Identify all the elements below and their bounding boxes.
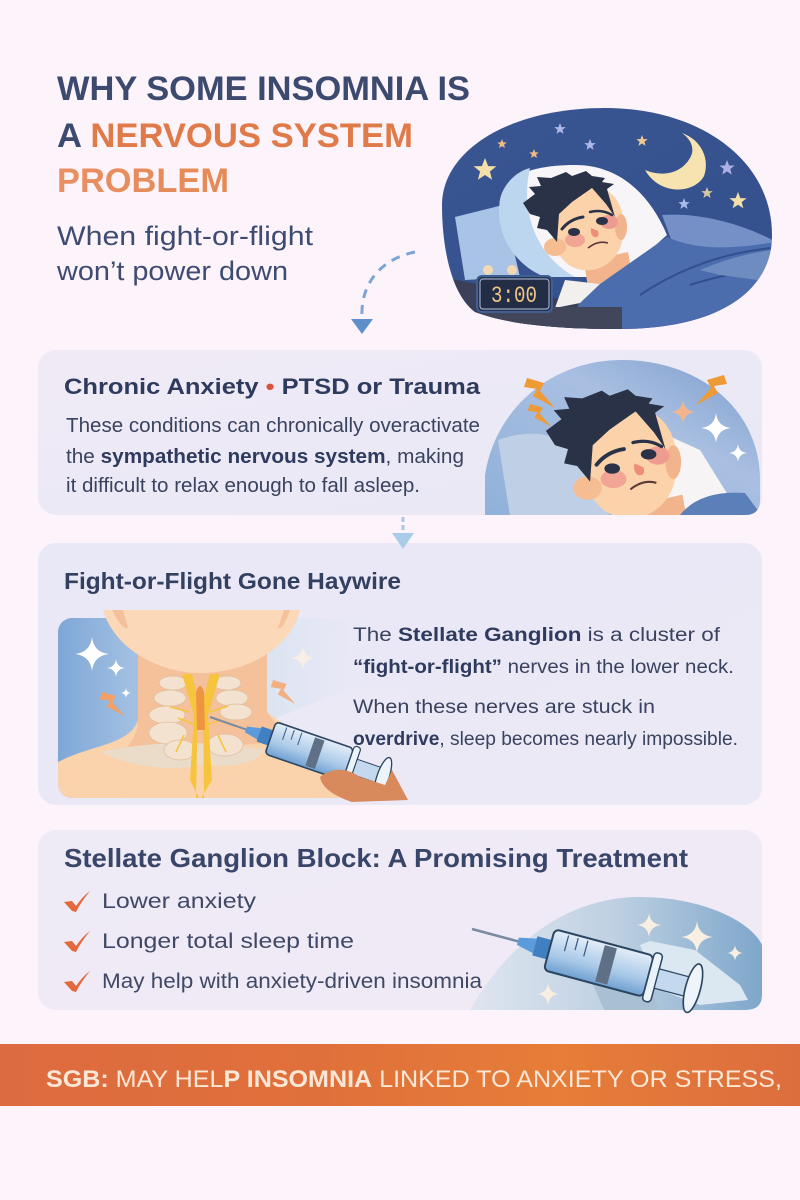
benefit: lower anxiety: Lower anxiety [102,890,257,913]
panel 1 heading: Chronic Anxiety • PTSD or Trauma [64,374,481,399]
benefit: longer total sleep time: Longer total sleep time [102,930,354,953]
panel 1 body text [66,415,480,497]
subtitle [56,221,314,286]
syringe [203,698,395,797]
panel: stellate ganglion block treatment [38,830,764,1014]
alarm clock showing 3:00 [477,265,552,312]
title: WHY SOME INSOMNIA IS [57,70,470,108]
illustration: syringe and gloved hand [466,895,764,1014]
stars [474,123,747,209]
panel: fight-or-flight gone haywire [38,543,762,805]
illustration: anxious man with lightning bolts [485,360,760,515]
panel 2 text: The Stellate Ganglion is a cluster of [353,625,721,646]
nightstand [481,307,622,329]
benefit: lower anxiety [64,890,257,913]
panel 1 body text: it difficult to relax enough to fall asleep. [66,475,420,497]
lightning bolts [524,375,727,426]
title [57,70,470,200]
title: A NERVOUS SYSTEM [57,117,413,155]
bottom banner [0,1044,800,1106]
panel 1 body text: the sympathetic nervous system , making [66,446,464,468]
arrow: connector to second panel [392,517,414,549]
bedding and pillows [440,165,772,330]
panel 1 body text: These conditions can chronically overactivate [66,415,480,437]
panel 2 text [353,625,738,750]
panel 3 heading: Stellate Ganglion Block: A Promising Treatment [64,843,688,873]
man's head [523,171,630,286]
illustration: sleepless man in bed at night [440,105,775,332]
crescent moon [645,133,706,190]
panel 2 text: overdrive, sleep becomes nearly impossible. [353,729,738,750]
chin and jaw [103,610,300,673]
illustration: neck anatomy with nerve cluster [58,610,410,802]
panel 2 heading: Fight-or-Flight Gone Haywire [64,568,401,594]
hand holding syringe [320,770,408,802]
panel: chronic anxiety and PTSD [38,350,762,515]
title: PROBLEM [57,162,229,200]
panel 2 text: “fight-or-flight” nerves in the lower neck. [353,657,734,678]
arrow: dashed curve to first panel [351,252,415,334]
alarm clock showing 3:00: 3:00 [491,283,537,309]
blanket [555,237,775,332]
panel 2 text: When these nerves are stuck in [353,697,655,718]
subtitle: won’t power down [56,256,288,286]
banner text: SGB: MAY HELP INSOMNIA LINKED TO ANXIETY OR STRESS, [46,1066,782,1093]
subtitle: When fight-or-flight [57,221,314,251]
benefit: anxiety-driven insomnia: May help with anxiety-driven insomnia [102,970,482,993]
